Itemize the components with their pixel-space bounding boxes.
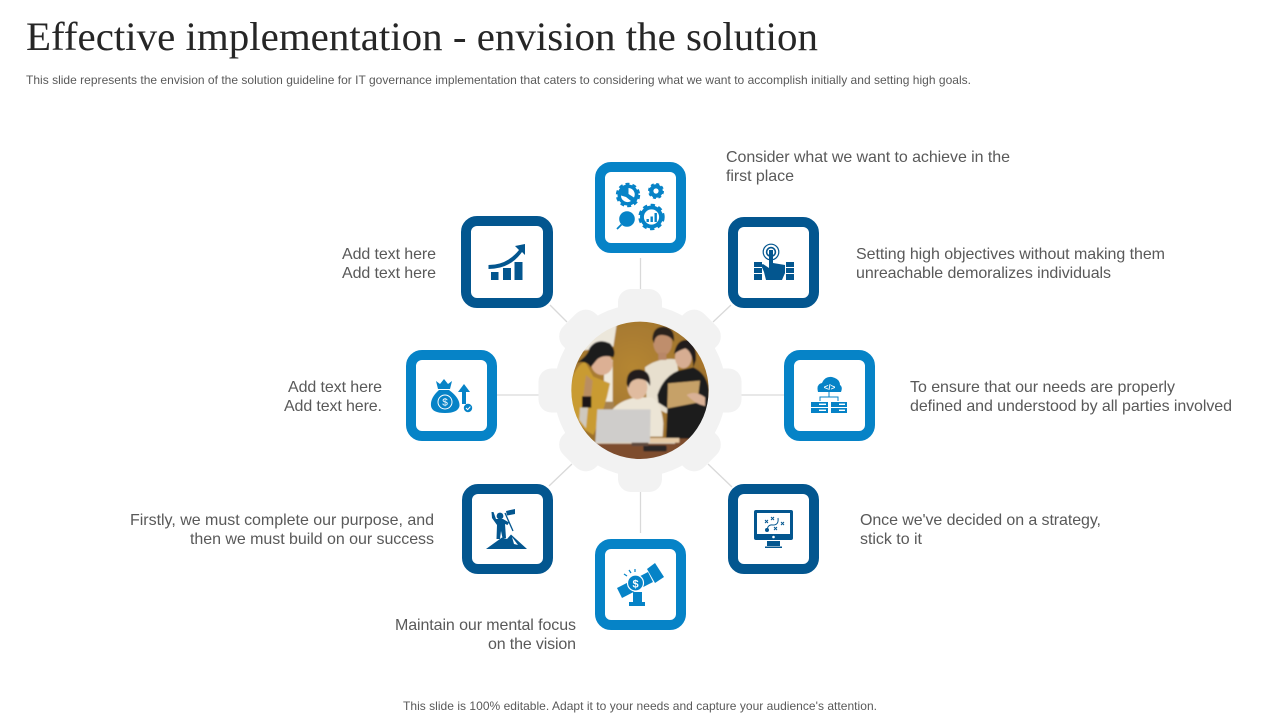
text: lower left callout: Firstly, we must complete our purpose, and xyxy=(130,512,434,529)
text: upper left callout xyxy=(342,246,436,282)
text: lower left callout xyxy=(130,512,434,548)
text: upper right callout: Setting high objectives without making them xyxy=(856,246,1165,263)
icon: rising bars with arrow xyxy=(488,244,525,280)
tile: touch control xyxy=(733,222,814,303)
text: right callout: To ensure that our needs are properly xyxy=(910,379,1175,396)
tile: summit xyxy=(467,489,548,569)
text: top right callout xyxy=(726,149,1010,185)
text: lower left callout: then we must build on our success xyxy=(190,531,434,548)
text: bottom callout xyxy=(395,617,576,653)
text: top right callout: Consider what we want to achieve in the xyxy=(726,149,1010,166)
text: left callout xyxy=(284,379,382,415)
icon: cloud with servers: </> xyxy=(824,383,836,392)
icon: monitor with game plan xyxy=(754,510,793,548)
text: bottom callout: Maintain our mental focus xyxy=(395,617,576,634)
text: right callout: defined and understood by all parties involved xyxy=(910,398,1232,415)
tile: analytics gears xyxy=(600,167,681,248)
footer note: This slide is 100% editable. Adapt it to your needs and capture your audience's attention. xyxy=(403,699,877,713)
text: top right callout: first place xyxy=(726,168,794,185)
woman with clipboard xyxy=(657,367,709,439)
text: upper left callout: Add text here xyxy=(342,265,436,282)
tile: cloud network xyxy=(789,355,870,436)
text: upper left callout: Add text here xyxy=(342,246,436,263)
text: lower right callout xyxy=(860,512,1101,548)
tile: money bag xyxy=(411,355,492,436)
text: upper right callout: unreachable demoralizes individuals xyxy=(856,265,1111,282)
tile: growth chart xyxy=(466,221,548,303)
seated man xyxy=(612,397,663,437)
table xyxy=(597,438,688,459)
text: lower right callout: stick to it xyxy=(860,531,923,548)
icon: money bag with up arrow: $ xyxy=(442,398,448,408)
subtitle: This slide represents the envision of the solution guideline for IT governance implementation that caters to considering what we want to accomplish initially and setting high goals. xyxy=(26,73,971,87)
text: bottom callout: on the vision xyxy=(488,636,576,653)
central gear xyxy=(538,289,742,492)
text: right callout xyxy=(910,379,1232,415)
laptop xyxy=(595,409,651,443)
icon: telescope with dollar coin: $ xyxy=(632,578,639,590)
icon: person with flag on mountain xyxy=(486,509,527,549)
text: lower right callout: Once we've decided on a strategy, xyxy=(860,512,1101,529)
team photo xyxy=(571,322,709,459)
connector lines xyxy=(497,258,784,533)
woman in yellow blazer xyxy=(570,362,610,435)
man standing at back xyxy=(645,359,679,413)
icon: gears and magnifier xyxy=(617,184,664,229)
icon: hand pressing button xyxy=(754,244,794,280)
title: Effective implementation - envision the solution xyxy=(26,14,818,59)
text: left callout: Add text here xyxy=(288,379,382,396)
tile: telescope xyxy=(600,544,681,625)
text: upper right callout xyxy=(856,246,1165,282)
text: left callout: Add text here. xyxy=(284,398,382,415)
tile: strategy monitor xyxy=(733,489,814,569)
